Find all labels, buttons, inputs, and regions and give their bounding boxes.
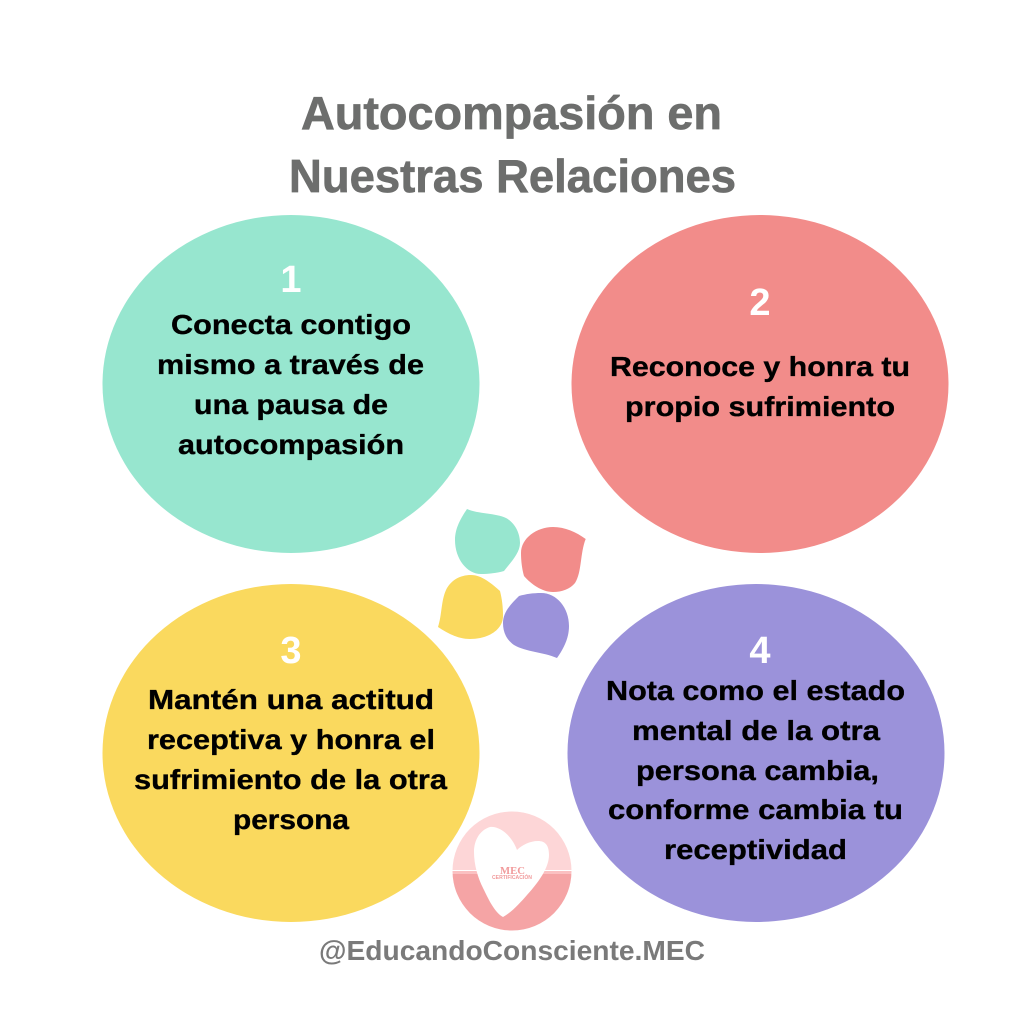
panel: step 1: 1 (280, 259, 302, 301)
panel: step 2 (572, 215, 948, 553)
panel: step 1: mismo a través de (157, 349, 424, 380)
title (289, 87, 736, 202)
panel: step 4 (568, 584, 944, 922)
icon: MEC logo: MEC (500, 865, 525, 877)
panel: step 3: sufrimiento de la otra (134, 764, 448, 795)
icon: MEC logo: CERTIFICACIÓN (492, 873, 532, 881)
panel: step 4: Nota como el estado (606, 675, 905, 706)
icon: MEC logo (450, 810, 574, 934)
panel: step 3: receptiva y honra el (147, 724, 435, 755)
panel: step 1: Conecta contigo (171, 309, 411, 340)
panel: step 2: propio sufrimiento (625, 391, 895, 422)
panel: step 4: 4 (749, 630, 771, 672)
panel: step 4: receptividad (664, 834, 847, 865)
panel: step 3: 3 (280, 630, 302, 672)
panel: step 1 (102, 215, 480, 553)
icon: four petals (438, 509, 586, 658)
panel: step 2: Reconoce y honra tu (610, 351, 910, 382)
panel: step 2: 2 (749, 282, 771, 324)
panel: step 4: mental de la otra (632, 715, 881, 746)
panel: step 4: persona cambia, (636, 755, 879, 786)
panel: step 3 (102, 584, 480, 922)
panel: step 1: una pausa de (194, 389, 388, 420)
title: Autocompasión en (301, 87, 722, 139)
panel: step 1: autocompasión (178, 429, 404, 460)
title: Nuestras Relaciones (289, 150, 736, 202)
handle: @EducandoConsciente.MEC (319, 935, 705, 966)
panel: step 4: conforme cambia tu (608, 794, 903, 825)
panel: step 3: persona (233, 804, 350, 835)
panel: step 3: Mantén una actitud (148, 684, 434, 715)
